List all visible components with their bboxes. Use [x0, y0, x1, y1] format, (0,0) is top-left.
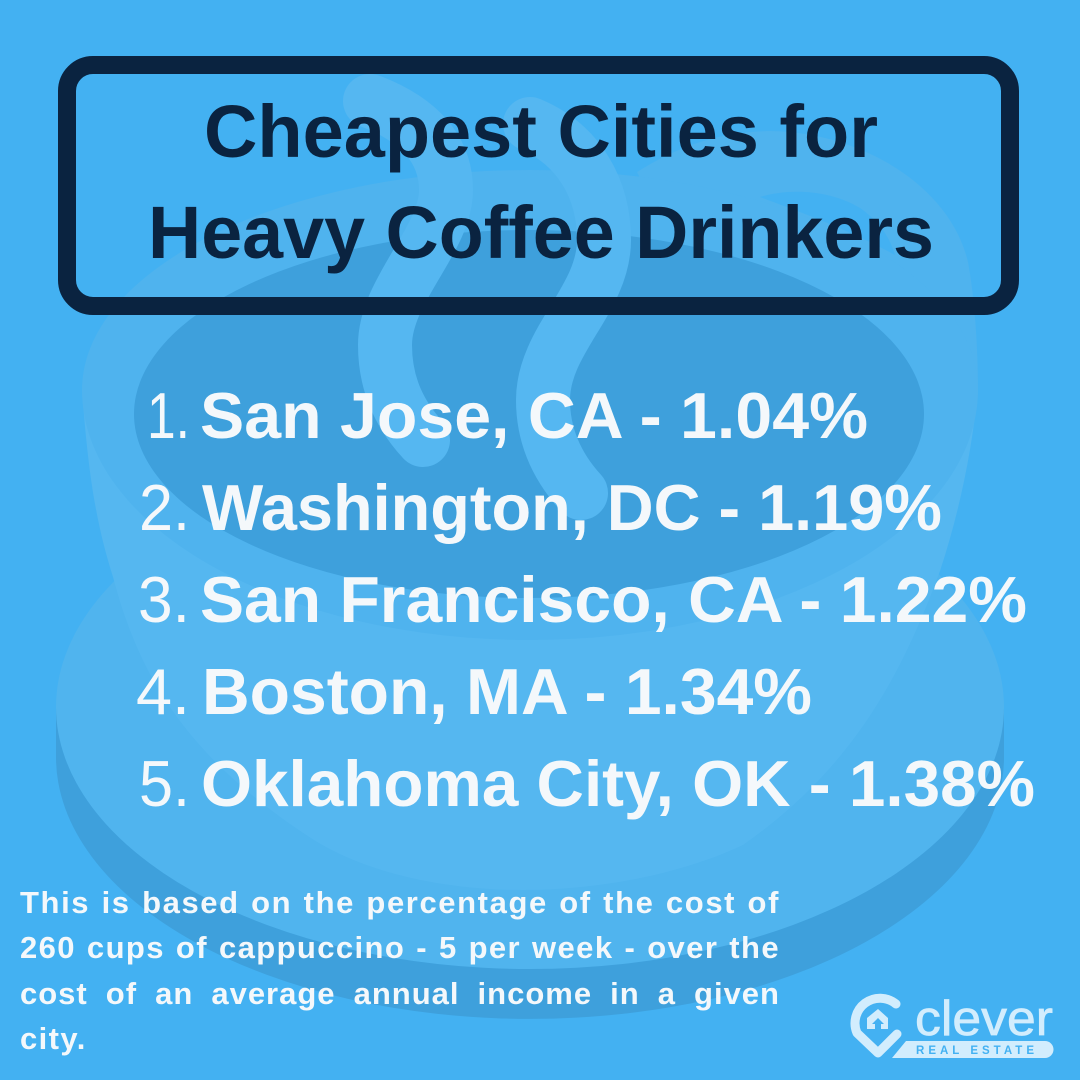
logo house	[867, 1009, 888, 1029]
saucer top	[56, 445, 1004, 969]
footnote: city.	[20, 1021, 87, 1056]
title box	[67, 65, 1010, 306]
title text	[148, 90, 934, 274]
item 1: San Jose, CA - 1.04%	[200, 379, 868, 452]
logo: clever real estate	[855, 992, 1054, 1058]
item 3: 3.	[138, 563, 190, 636]
footnote	[20, 885, 780, 1056]
item 5: Oklahoma City, OK - 1.38%	[201, 747, 1035, 820]
ranked list	[136, 379, 1035, 820]
logo wordmark: clever	[915, 992, 1053, 1046]
item 3: San Francisco, CA - 1.22%	[200, 563, 1027, 636]
coffee surface	[134, 230, 924, 598]
footnote: cost of an average annual income in a given	[20, 976, 780, 1011]
cup body	[82, 390, 978, 890]
item 4: Boston, MA - 1.34%	[202, 655, 812, 728]
cup handle	[637, 131, 978, 390]
item 1: 1.	[147, 379, 190, 452]
cup rim	[82, 170, 978, 640]
item 2: 2.	[139, 471, 190, 544]
saucer shadow	[56, 707, 1004, 1019]
steam	[370, 101, 604, 493]
title text: Heavy Coffee Drinkers	[148, 191, 934, 274]
logo tagline: REAL ESTATE	[916, 1045, 1034, 1057]
title frame	[67, 65, 1010, 306]
logo banner	[892, 1041, 1054, 1058]
footnote: This is based on the percentage of the cost of	[20, 885, 780, 920]
icon: coffee cup watermark	[56, 101, 1004, 1019]
item 5: 5.	[139, 747, 190, 820]
logo pin	[855, 998, 897, 1053]
footnote: 260 cups of cappuccino - 5 per week - over the	[20, 930, 780, 965]
item 2: Washington, DC - 1.19%	[202, 471, 942, 544]
title text: Cheapest Cities for	[204, 90, 878, 173]
item 4: 4.	[136, 655, 190, 728]
